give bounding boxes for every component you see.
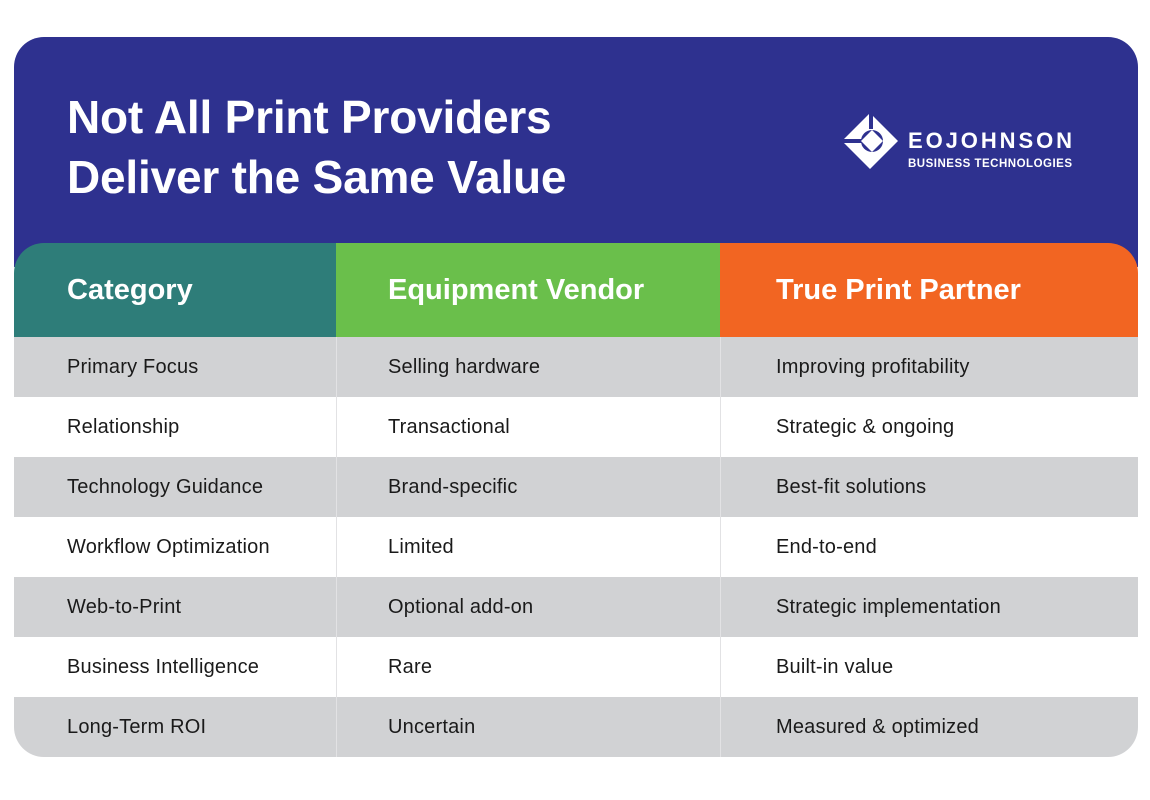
row 7 (14, 697, 1138, 757)
row 2: Relationship (67, 416, 179, 438)
row 6: Business Intelligence (67, 656, 259, 678)
header: true print partner: True Print Partner (776, 274, 1021, 306)
row 1 (14, 337, 1138, 397)
row 7: Uncertain (388, 716, 475, 738)
header: category: Category (67, 274, 193, 306)
row 5 (14, 577, 1138, 637)
logo (844, 114, 1072, 170)
row 3: Technology Guidance (67, 476, 263, 498)
title: Deliver the Same Value (67, 151, 566, 203)
row 4: End-to-end (776, 536, 877, 558)
logo: EOJOHNSON (908, 128, 1072, 153)
row 3: Best-fit solutions (776, 476, 926, 498)
logo: BUSINESS TECHNOLOGIES (908, 158, 1072, 170)
row 1: Primary Focus (67, 356, 199, 378)
row 5: Optional add-on (388, 596, 533, 618)
row 3 (14, 457, 1138, 517)
header: category (14, 243, 336, 337)
row 3: Brand-specific (388, 476, 518, 498)
header: true print partner (720, 243, 1138, 337)
title: Not All Print Providers (67, 91, 551, 143)
row 2: Strategic & ongoing (776, 416, 954, 438)
row 6: Built-in value (776, 656, 893, 678)
title (67, 91, 566, 203)
row 4 (67, 536, 877, 558)
row 4: Workflow Optimization (67, 536, 270, 558)
row 5: Strategic implementation (776, 596, 1001, 618)
header band (14, 37, 1138, 267)
row 7: Measured & optimized (776, 716, 979, 738)
row 6: Rare (388, 656, 432, 678)
row 6 (67, 656, 893, 678)
row 1: Improving profitability (776, 356, 970, 378)
row 5: Web-to-Print (67, 596, 181, 618)
row 2 (67, 416, 954, 438)
header: equipment vendor (336, 243, 720, 337)
row 1: Selling hardware (388, 356, 540, 378)
row 7: Long-Term ROI (67, 716, 206, 738)
header: equipment vendor: Equipment Vendor (388, 274, 644, 306)
row 4: Limited (388, 536, 454, 558)
row 2: Transactional (388, 416, 510, 438)
